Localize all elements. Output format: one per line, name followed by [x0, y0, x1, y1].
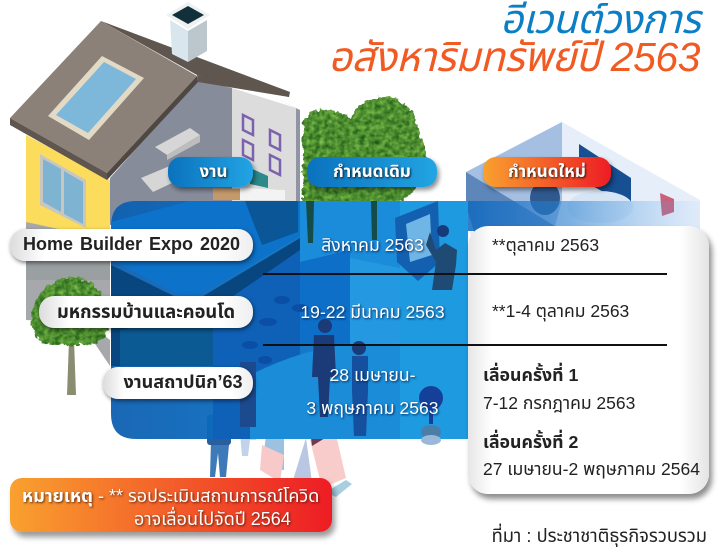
plant pot below panel: [421, 435, 441, 445]
shelves: [141, 128, 200, 192]
people in panel: [240, 319, 443, 439]
window: [40, 154, 86, 228]
exhibition people and stands below table: [207, 410, 352, 497]
original date: row 3: [306, 365, 440, 420]
band fading over room: [468, 201, 700, 231]
right room illustration: [466, 122, 700, 235]
note text line 2: อาจเลื่อนไปจัดปี 2564: [134, 509, 291, 529]
header pill: event: [168, 157, 253, 187]
header pill: event: งาน: [199, 162, 228, 181]
new date: second postponement date: 27 เมษายน-2 พฤษภาคม 2564: [483, 459, 700, 479]
interior silhouettes in panel: [111, 201, 300, 300]
panel: new dates card: [468, 226, 709, 494]
header pill: original date: [307, 157, 437, 187]
tree trunks in panel: [306, 201, 377, 243]
event label: house and condo fair: มหกรรมบ้านและคอนโด: [57, 301, 235, 322]
original date: row 1: สิงหาคม 2563: [321, 235, 424, 255]
desk: [213, 168, 285, 200]
header pill: new date: กำหนดใหม่: [508, 162, 586, 181]
lower wall: [26, 240, 110, 280]
house: [10, 2, 300, 366]
tree behind table: [303, 97, 427, 243]
lower left tree: [32, 277, 110, 395]
new date: row 1: **ตุลาคม 2563: [492, 235, 599, 255]
skylight: [48, 56, 144, 140]
original date: row 2: 19-22 มีนาคม 2563: [300, 302, 445, 322]
blue table panel: [111, 201, 468, 439]
event label: architect expo: งานสถาปนิก’63: [124, 372, 242, 392]
original date: row 3: 3 พฤษภาคม 2563: [306, 398, 439, 418]
chimney: [166, 2, 210, 62]
leaves: [231, 296, 308, 364]
header pill: new date: [483, 157, 611, 187]
title: line 2: อสังหาริมทรัพย์ปี 2563: [328, 34, 700, 80]
purple wall frames: [243, 115, 280, 175]
event label: Home Builder Expo: [10, 229, 253, 261]
row divider 2: [263, 344, 667, 346]
note box: [10, 478, 332, 532]
row divider 1: [263, 273, 667, 275]
event label: house and condo fair: [39, 296, 253, 328]
event label: Home Builder Expo: Home Builder Expo 2020: [23, 234, 240, 254]
source: ที่มา : ประชาชาติธุรกิจรวบรวม: [492, 525, 707, 546]
roof: [101, 21, 290, 97]
new date: first postponement date: 7-12 กรกฎาคม 2563: [483, 393, 635, 413]
new date: first postponement heading: เลื่อนครั้งที่ 1: [483, 365, 578, 385]
note text line 1: หมายเหตุ - ** รอประเมินสถานการณ์โควิด: [22, 486, 319, 506]
new date: row 2: **1-4 ตุลาคม 2563: [492, 301, 629, 321]
tablet and reader: [350, 201, 457, 345]
event label: architect expo: [103, 367, 253, 399]
header pill: original date: กำหนดเดิม: [333, 162, 411, 181]
new date: second postponement heading: เลื่อนครั้งที่ 2: [483, 432, 578, 452]
original date: row 3: 28 เมษายน-: [330, 365, 415, 385]
